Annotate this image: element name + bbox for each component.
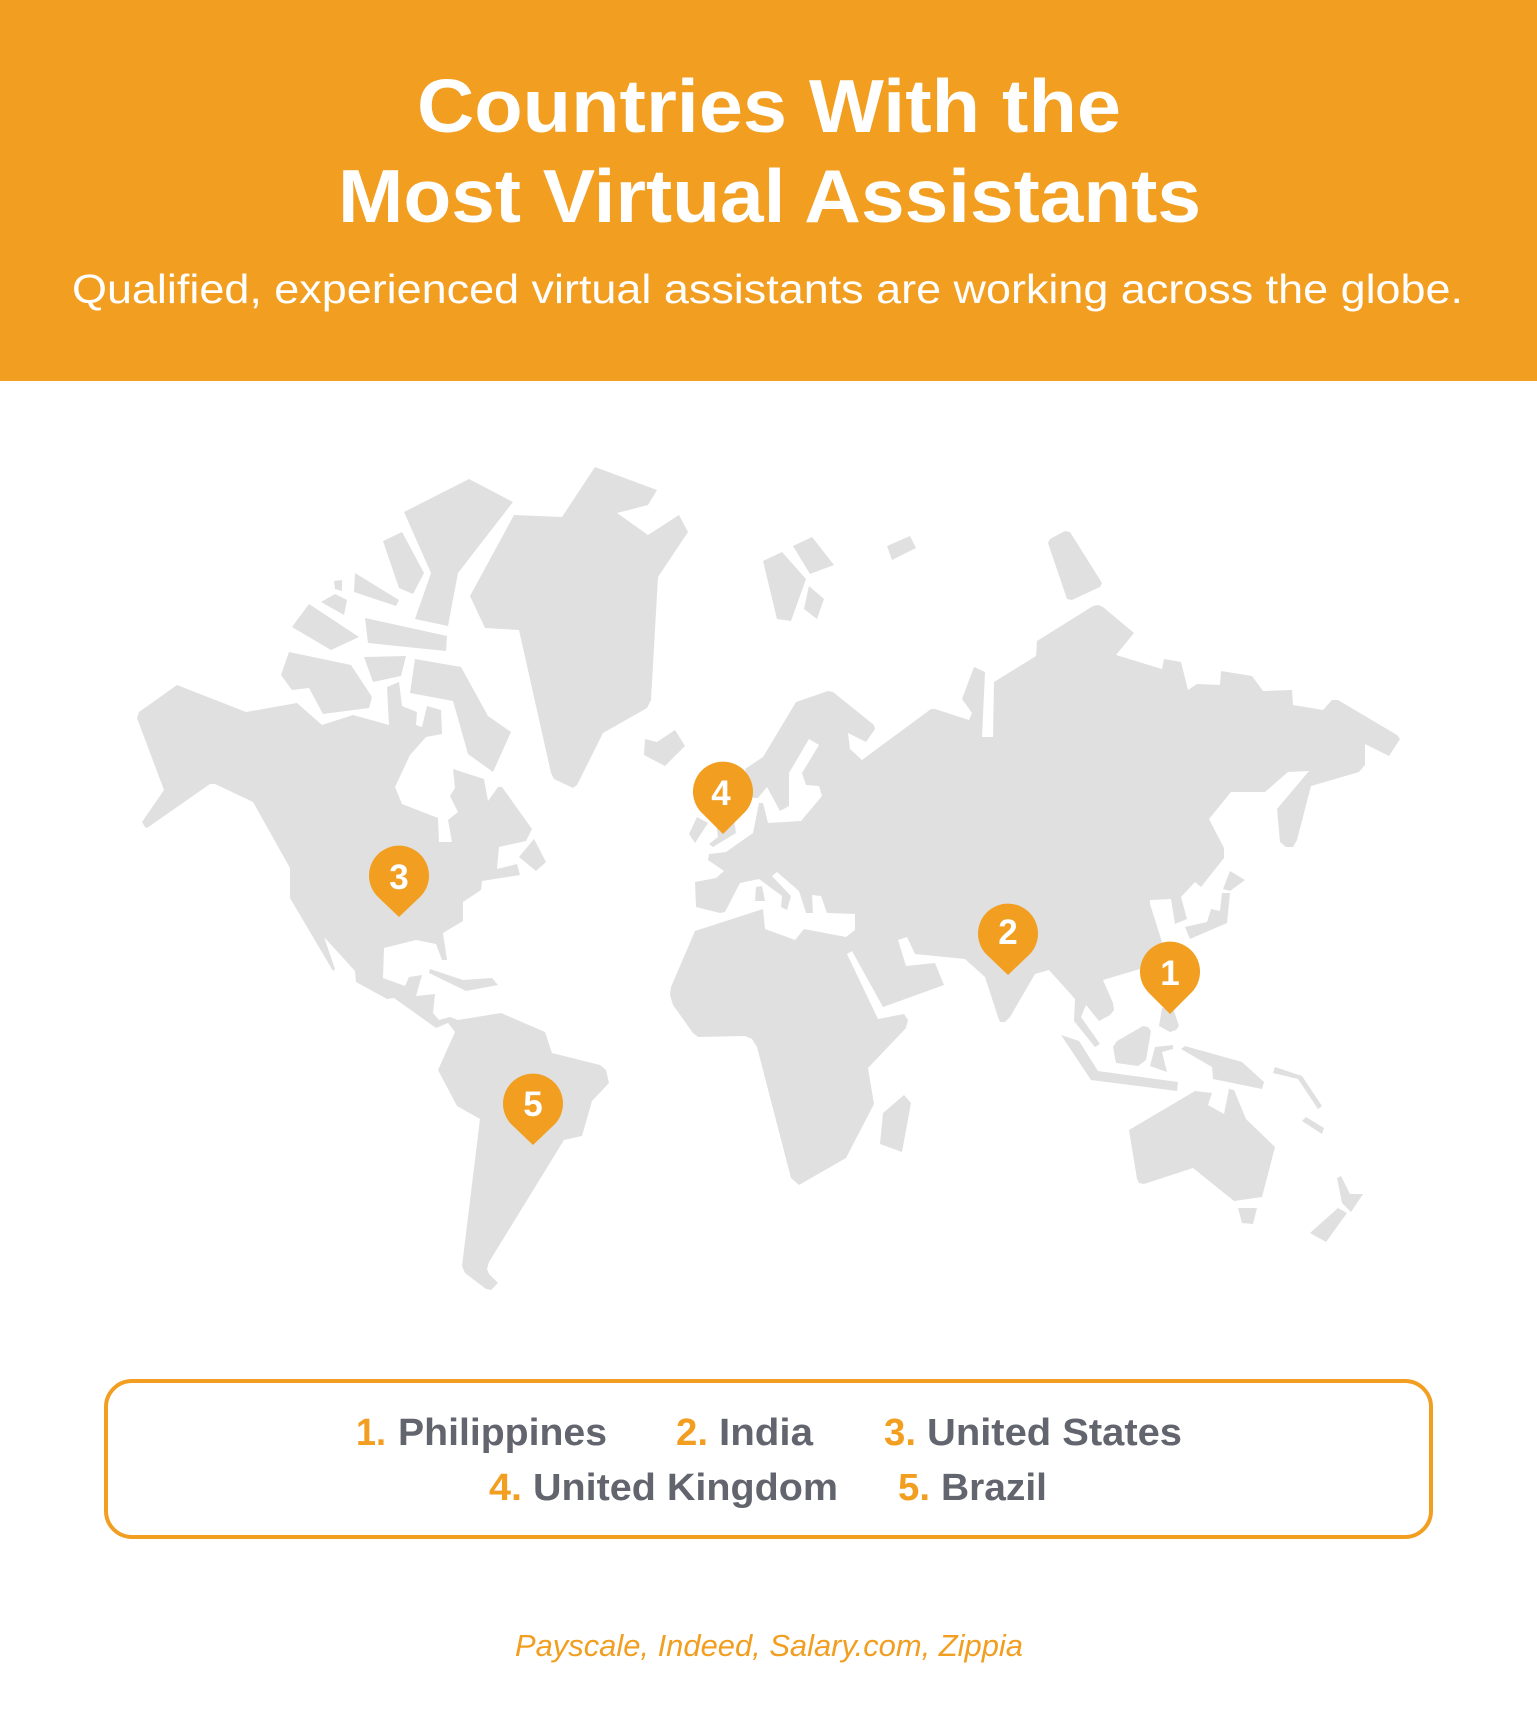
Indonesia and New Guinea (1061, 1026, 1264, 1091)
pin 5: Brazil (503, 1074, 563, 1145)
world map (137, 467, 1400, 1290)
pin 1: Philippines: 1 (1160, 954, 1180, 993)
sources: Payscale, Indeed, Salary.com, Zippia (515, 1628, 1023, 1663)
legend item 5 (898, 1467, 1047, 1509)
Newfoundland (519, 839, 546, 871)
legend item 1: Philippines (398, 1412, 607, 1454)
legend item 3: 3. (884, 1412, 916, 1454)
New Zealand (1310, 1176, 1363, 1242)
Iceland (644, 730, 685, 766)
subtitle: Qualified, experienced virtual assistants are working across the globe. (72, 266, 1463, 312)
pin 3: United States (369, 846, 429, 917)
legend item 4: 4. (489, 1467, 522, 1509)
pin 1: Philippines (1140, 942, 1200, 1014)
legend panel (106, 1381, 1431, 1537)
Canadian Arctic islands (281, 479, 513, 772)
Ireland (689, 817, 708, 843)
pin 3: United States: 3 (389, 858, 409, 897)
Great Britain (709, 815, 736, 847)
pin 2: India (978, 904, 1038, 975)
Australia (1129, 1089, 1275, 1201)
Mediterranean island (755, 886, 765, 901)
Japan (1185, 871, 1245, 939)
title (338, 64, 1201, 238)
pin 5: Brazil: 5 (523, 1085, 543, 1124)
legend item 5: 5. (898, 1467, 930, 1509)
legend item 2: India (719, 1412, 814, 1454)
title: Countries With the (417, 64, 1121, 148)
Cuba and Caribbean (429, 969, 498, 991)
Tasmania (1238, 1208, 1257, 1224)
Svalbard and Arctic islands (763, 531, 1102, 621)
Eurasia and Africa (670, 605, 1400, 1185)
header banner (0, 0, 1537, 381)
North and South America (137, 682, 609, 1290)
Greenland (470, 467, 688, 788)
legend item 2 (676, 1412, 814, 1454)
legend item 1: 1. (356, 1412, 386, 1454)
pin 2: India: 2 (998, 913, 1018, 952)
legend item 2: 2. (676, 1412, 708, 1454)
map pins (369, 762, 1200, 1145)
Pacific islands (1273, 1067, 1324, 1134)
Philippines (1159, 1008, 1179, 1032)
legend item 4: United Kingdom (533, 1467, 838, 1509)
legend item 5: Brazil (941, 1467, 1047, 1509)
Madagascar (880, 1095, 911, 1152)
pin 4: United Kingdom (693, 762, 753, 834)
legend item 3: United States (927, 1412, 1182, 1454)
pin 4: United Kingdom: 4 (711, 774, 731, 813)
title: Most Virtual Assistants (338, 154, 1201, 238)
